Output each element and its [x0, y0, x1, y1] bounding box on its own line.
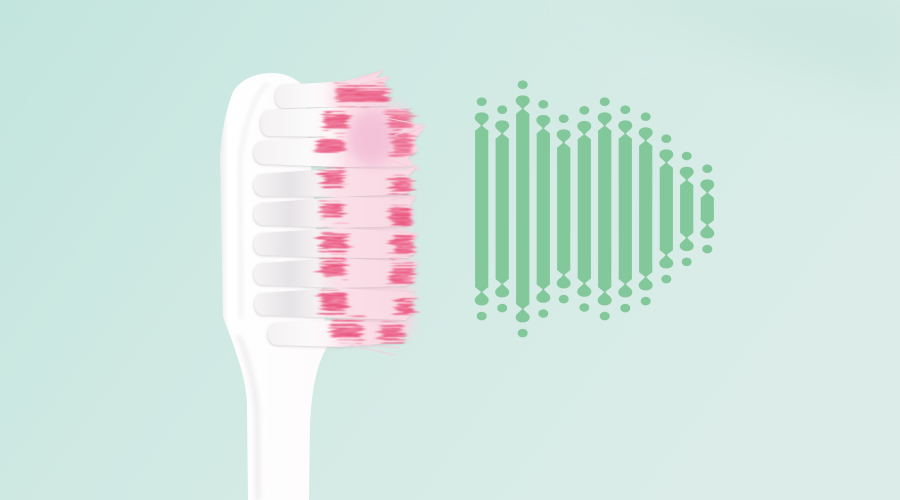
bar 4: [536, 100, 550, 318]
sound wave graphic: [475, 80, 714, 337]
bar 1: [475, 97, 489, 320]
hot pink patches: [318, 87, 413, 340]
brush head and neck: [220, 73, 327, 500]
bar 10: [659, 134, 673, 283]
bar 5: [557, 114, 571, 303]
bar 7: [598, 97, 612, 320]
head inner ridge: [240, 84, 268, 318]
toothbrush: [220, 70, 425, 500]
bar 9: [639, 112, 653, 305]
bar 2: [495, 105, 509, 312]
bar 8: [618, 105, 632, 312]
centre pink glow: [348, 110, 396, 166]
bristle tufts: [254, 70, 425, 347]
bar 6: [577, 106, 591, 312]
bristle block: pale pink: [335, 102, 412, 335]
stray bristle tips: [340, 70, 425, 355]
bar 12: [700, 164, 714, 253]
bar 11: [680, 152, 694, 266]
bar 3: [516, 80, 530, 337]
neck shading: [235, 335, 261, 500]
